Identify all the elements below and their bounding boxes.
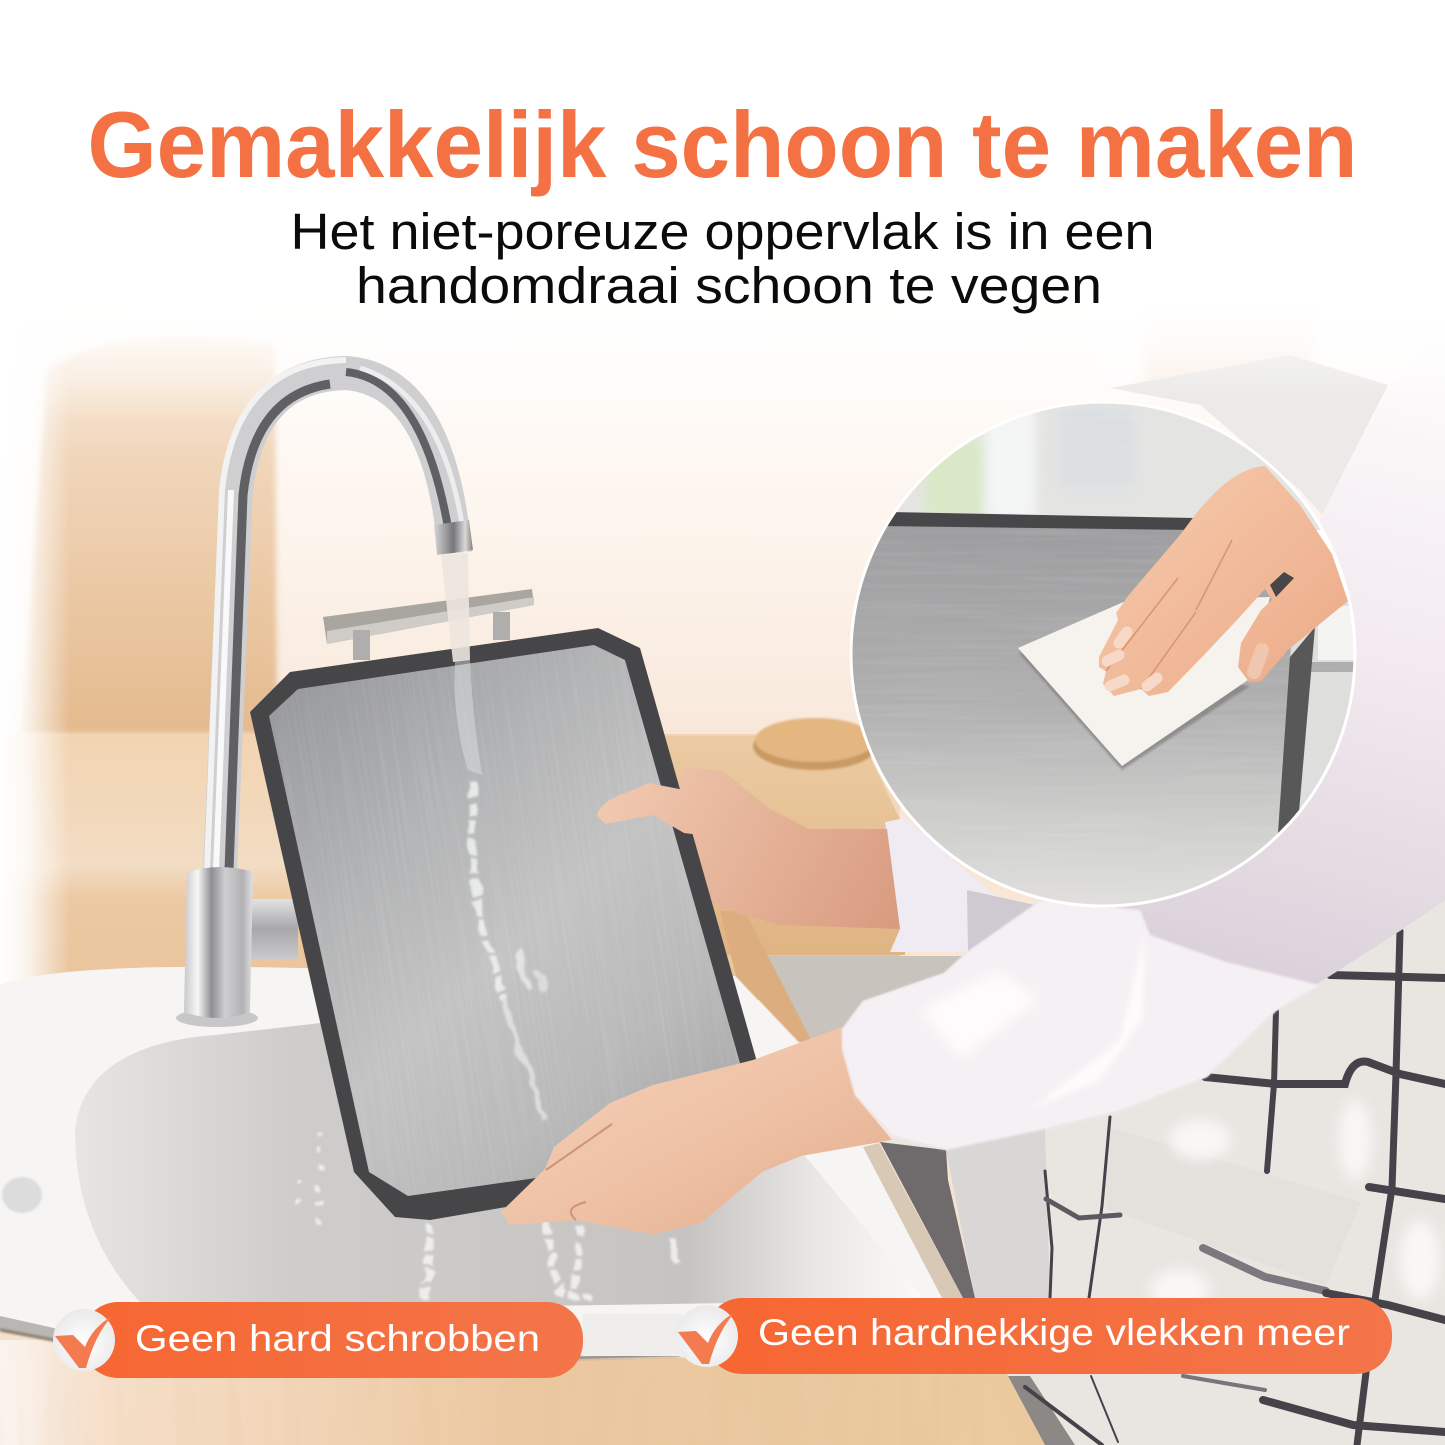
fade at left edge [0,300,70,1020]
inset hand [1099,466,1348,696]
dark towel [880,1142,975,1298]
board hanger [323,589,534,644]
fade over top right [1100,290,1445,400]
counter edge strip [720,911,812,1042]
inset background right [1290,601,1354,810]
apron strap [1110,355,1388,515]
badge: Geen hard schrobben [53,1302,583,1378]
inset board surface [852,526,1291,904]
water splashes [298,1130,676,1300]
title: Gemakkelijk schoon te maken [88,92,1358,197]
shirt cuff behind [885,818,1035,952]
counter right of board [640,736,905,955]
kitchen counter [0,734,900,1000]
inset circle: wiping the board [840,400,1370,925]
faucet side pipe [248,899,298,959]
wood wall panel [21,337,277,734]
wooden plate [753,718,877,770]
faucet flange [176,1009,258,1027]
apron pocket strap [1106,1126,1361,1286]
finger creases [1106,540,1232,689]
sink [0,967,963,1360]
cutting board [250,553,756,1220]
curtain far right [1145,300,1315,390]
faucet base [184,867,253,1018]
white sleeve [842,320,1445,1150]
apron highlights [1150,1100,1440,1310]
counter front [766,956,1000,1042]
subtitle: handomdraai schoon te vegen [356,257,1102,314]
lower arm and hand [501,1027,892,1234]
faucet spout tip [434,520,473,555]
sink right edge strip [863,1143,963,1298]
apron: plaid [880,890,1445,1445]
badge: Geen hardnekkige vlekken meer: Geen hardnekkige vlekken meer [758,1312,1350,1353]
icon: check mark [676,1305,738,1367]
icon: check mark [53,1309,115,1371]
upper hand: palm [670,767,900,929]
faucet neck [207,360,466,870]
sink outer rim [0,1316,85,1345]
fade at top [0,0,1445,420]
subtitle [290,203,1154,314]
faucet [176,360,534,1027]
badge: Geen hardnekkige vlekken meer [676,1298,1392,1374]
sleeve forearm highlight [842,900,1319,1150]
bottom counter [0,1340,1060,1445]
badge: Geen hard schrobben: Geen hard schrobben [135,1318,540,1359]
fingernails [1107,632,1262,686]
upper hand: thumb [597,783,700,835]
water stream [441,553,545,1120]
plaid lines [1025,931,1445,1445]
paper towel [1018,597,1270,770]
subtitle: Het niet-poreuze oppervlak is in een [290,203,1154,260]
